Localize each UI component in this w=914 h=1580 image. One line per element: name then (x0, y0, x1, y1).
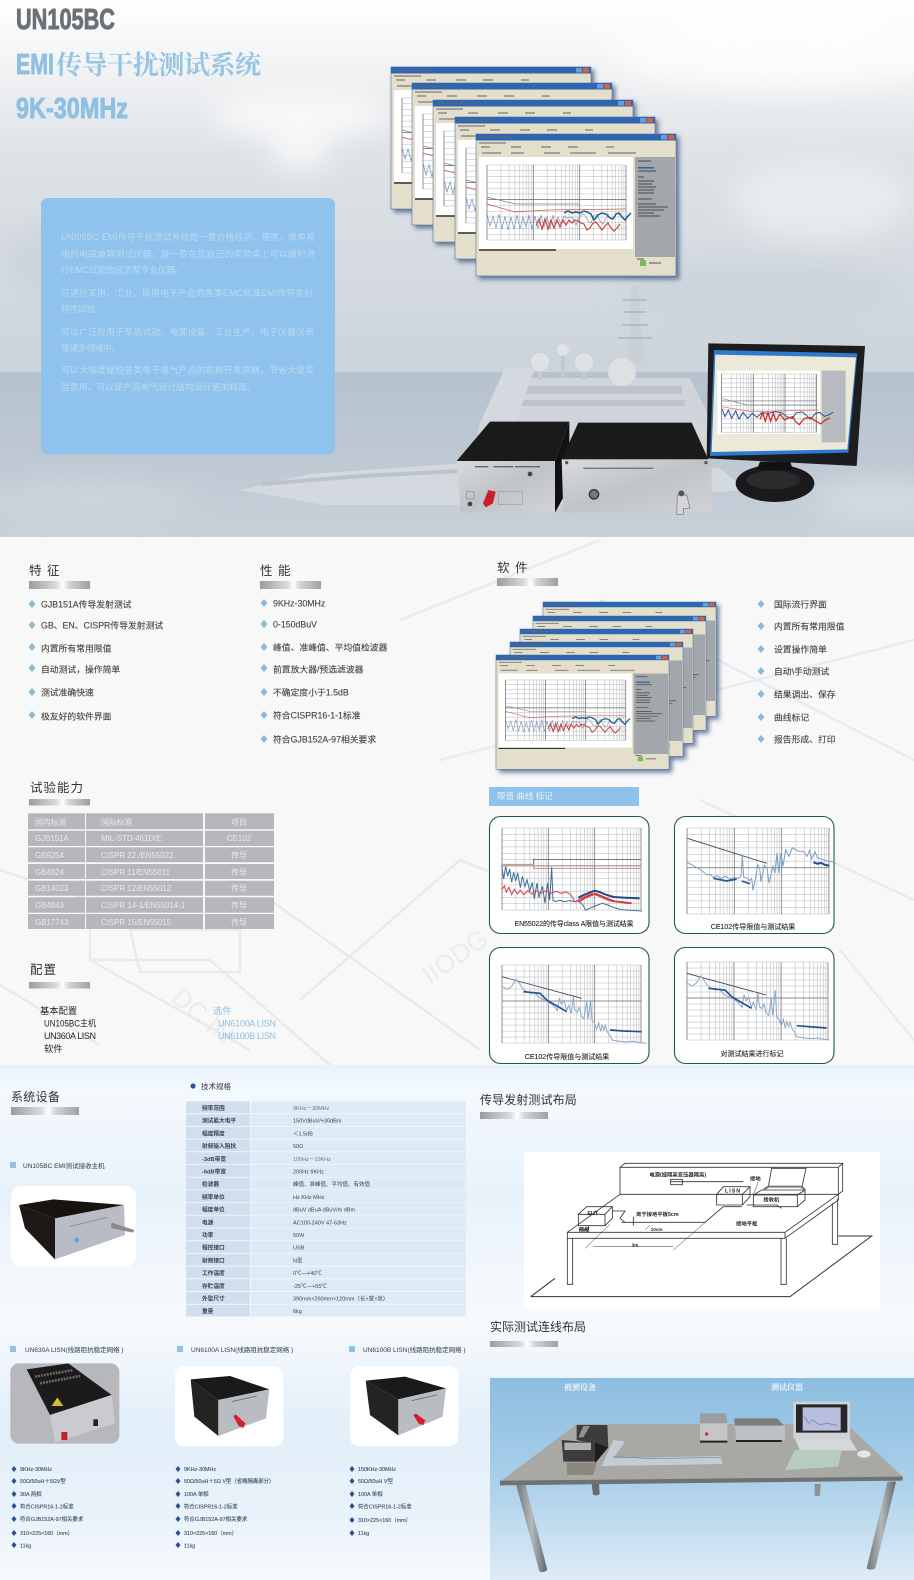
software feature list: 国际流行界面 (774, 598, 827, 610)
spec list: UN6100A: 符合CISPR16-1-2标准 (184, 1502, 238, 1510)
tab: limits and curve markers: 限值 曲线 标记 (497, 791, 553, 801)
spec list: UN6100B: 符合CISPR16-1-2标准 (358, 1502, 412, 1510)
performance list: 9KHz-30MHz (273, 598, 325, 608)
technical specification table: 频率单位 (202, 1193, 225, 1201)
heading: 试验能力 (29, 780, 90, 806)
table: test capability: 传导 (231, 883, 247, 893)
conducted emission test layout diagram: 接地 (750, 1174, 761, 1182)
heading: 技术规格: 技术规格 (201, 1081, 231, 1091)
technical specification table: 幅度单位 (202, 1206, 225, 1214)
conducted emission test layout diagram: 离于接地平板5cm (636, 1210, 679, 1218)
heading: 实际测试连线布局: 实际测试连线布局 (490, 1319, 586, 1334)
receiver and laptop (753, 1168, 806, 1207)
optional configuration (213, 1005, 276, 1041)
spec list: UN6100A: 100A 单相 (184, 1490, 209, 1498)
heading: 传导发射测试布局: 传导发射测试布局 (480, 1092, 577, 1107)
LISN unit (457, 422, 569, 513)
basic configuration: 基本配置 (40, 1005, 77, 1016)
accessory: UN6100B LISN: UN6100B LISN(线路阻抗稳定网络 ) (363, 1345, 466, 1354)
product photo: UN6100A (175, 1366, 283, 1446)
optional configuration: 选件 (213, 1005, 232, 1016)
faint circuit drawing backdrop: DC IN (166, 982, 240, 1050)
product image: UN105BC (11, 1186, 136, 1267)
accessory: UN630A LISN: UN630A LISN(线路阻抗稳定网络 ) (25, 1345, 124, 1354)
performance list: 符合GJB152A-97相关要求 (273, 734, 376, 744)
technical specification table: 存贮温度 (202, 1282, 225, 1290)
spec list: UN6100A: 50Ω/50uH＋5Ω V型（省略隔离部分） (184, 1477, 274, 1485)
technical specification table: 100Hz－10KHz (293, 1157, 331, 1163)
product photo: UN6100B (350, 1366, 458, 1446)
spec list: UN630A: 11kg (20, 1544, 31, 1550)
technical specification table: 150VdBuV/+30dBm (293, 1119, 342, 1125)
table: test capability: GB17743 (35, 918, 69, 927)
title: UN105BC: UN105BC (16, 4, 115, 36)
conducted emission test layout diagram: 10cm (651, 1227, 663, 1232)
basic configuration (40, 1005, 96, 1054)
heading: 性能: 性 能 (260, 564, 291, 578)
table: test capability: 项目 (231, 818, 247, 827)
cloud haze (0, 12, 914, 518)
table: test capability: CE102 (227, 834, 251, 843)
technical specification table: 390mm×260mm×120mm（长×宽×高） (293, 1294, 388, 1302)
accessory: UN630A LISN (10, 1345, 124, 1550)
warship silhouette (240, 286, 745, 505)
heading: 特征: 特 征 (29, 563, 60, 578)
technical specification table: 9KHz－30MHz (293, 1106, 330, 1112)
software feature list: 结果调出、保存 (774, 688, 836, 700)
label: UN105BC receiver (10, 1161, 105, 1170)
technical specification table: 射频输入阻抗 (202, 1142, 236, 1150)
performance list: 符合CISPR16-1-1标准 (273, 710, 361, 720)
table: test capability: GJB151A (35, 834, 70, 843)
conducted emission test layout diagram (524, 1152, 880, 1309)
table: test capability: 传导 (231, 867, 247, 877)
technical specification table: 电源 (202, 1218, 214, 1226)
technical specification table: 工作温度 (202, 1269, 225, 1277)
faint circuit drawing backdrop: IIODG (416, 923, 494, 990)
software feature list: 内置所有常用限值 (774, 620, 845, 632)
software feature list (758, 598, 845, 744)
monitor with test software (707, 343, 865, 502)
EUT box (578, 1207, 612, 1226)
technical specification table: ＜1.5dB (293, 1131, 313, 1137)
optional configuration: UN6100B LISN (218, 1031, 276, 1041)
feature list: 自动测试，操作简单 (41, 664, 120, 674)
conducted emission test layout diagram: 接收机 (763, 1196, 780, 1204)
technical specification table: 外型尺寸 (202, 1294, 225, 1302)
chart card: CE102 limits (upper): CE102传导限值与测试结果 (711, 922, 795, 931)
heading: 系统设备 (11, 1090, 79, 1115)
spec list: UN630A: 符合CISPR16-1-2标准 (20, 1502, 74, 1510)
spec list: UN630A (12, 1466, 84, 1550)
table: test capability: CISPR 15/EN55015 (101, 918, 172, 927)
spec list: UN630A: 310×225×160（mm） (20, 1530, 73, 1537)
technical specification table: -25℃—+55℃ (293, 1283, 327, 1290)
spec list: UN6100A: 310×225×160（mm） (184, 1530, 237, 1537)
chart card: CE102 limits (lower): CE102传导限值与测试结果 (525, 1052, 609, 1061)
heading: 技术规格 (190, 1081, 231, 1091)
panel: hero banner (0, 0, 914, 537)
optional configuration: UN6100A LISN (218, 1018, 276, 1028)
accessory: UN6100B LISN (349, 1345, 466, 1537)
basic configuration: UN360A LISN (44, 1031, 96, 1041)
technical specification table: Hz KHz MHz (293, 1195, 325, 1201)
table: test capability: CISPR 11/EN55011 (101, 868, 170, 877)
software window stack (496, 602, 716, 769)
cables (579, 1182, 782, 1230)
technical specification table: 200Hz 9KHz (293, 1170, 324, 1176)
panel: features and software section (0, 537, 914, 1065)
feature list: GJB151A传导发射测试 (41, 598, 132, 610)
performance list: 峰值、准峰值、平均值检波器 (273, 642, 388, 652)
spec list: UN630A: 9KHz-30MHz (20, 1467, 52, 1473)
panel: product description: 行EMC试验的经济型专业仪器。 (61, 264, 184, 275)
chart card: marked results: 对测试结果进行标记 (720, 1049, 784, 1058)
heading: 配置 (29, 963, 90, 988)
spec list: UN6100B: 50Ω/50uH V型 (358, 1477, 394, 1485)
table: test capability: 传导 (231, 917, 247, 927)
software feature list: 自动\手动测试 (774, 666, 829, 676)
performance list: 前置放大器/预选滤波器 (273, 664, 364, 674)
table: test capability: GB14023 (35, 884, 69, 893)
spec list: UN6100A: 9KHz-30MHz (184, 1467, 216, 1473)
panel: product description: 等诸多领域中。 (61, 342, 120, 353)
spec list: UN6100B: 150KHz-30MHz (358, 1467, 396, 1473)
technical specification table: 检波器 (202, 1180, 219, 1188)
table: test capability: CISPR 14-1/EN55014-1 (101, 901, 185, 910)
conducted emission test layout diagram: 预规 (579, 1226, 590, 1234)
feature list: 内置所有常用限值 (41, 642, 112, 654)
spec list: UN6100A (176, 1466, 274, 1550)
spec list: UN6100A: 符合GJB152A-97相关要求 (184, 1515, 248, 1523)
section background (0, 537, 914, 1065)
heading: 系统设备: 系统设备 (11, 1090, 60, 1104)
panel: product description: 特性试验。 (61, 303, 103, 314)
technical specification table (186, 1081, 466, 1316)
receiver main unit (562, 423, 712, 514)
heading: 试验能力: 试验能力 (30, 780, 84, 795)
table: test capability: GB4843 (35, 901, 65, 910)
technical specification table: N型 (293, 1256, 303, 1264)
sea background (0, 372, 914, 537)
accessory: UN6100A LISN (175, 1345, 293, 1550)
spec list: UN6100B: 11kg (358, 1531, 369, 1537)
heading: 软件 (497, 561, 558, 586)
feature list: GB、EN、CISPR传导发射测试 (41, 620, 163, 630)
tab: limits and curve markers (489, 787, 639, 806)
panel: product description: 可以大幅度缩短各类电子电气产品的前期开发周期，节省大量实 (61, 364, 314, 375)
software feature list: 报告形成、打印 (774, 734, 836, 744)
chart card: CE102 limits (upper) (674, 816, 836, 934)
table: test capability: 传导 (231, 850, 247, 860)
panel: product description: 验费用。可以使产品电气设计结构设计更加精简。 (61, 381, 256, 392)
performance list: 0-150dBuV (273, 620, 317, 630)
photo: actual test wiring setup (490, 1378, 914, 1580)
label: UN105BC receiver: UN105BC EMI测试接收主机 (23, 1161, 105, 1170)
feature list: 测试准确快速 (41, 686, 94, 698)
technical specification table: 峰值、准峰值、平均值、有效值 (293, 1180, 371, 1188)
chart card: marked results (674, 948, 834, 1064)
software window stack (391, 67, 676, 276)
title: 9K-30MHz: 9K-30MHz (16, 93, 128, 125)
technical specification table: 50W (293, 1233, 305, 1239)
heading: 传导发射测试布局 (480, 1092, 577, 1119)
heading: 实际测试连线布局 (490, 1319, 586, 1347)
technical specification table: 6kg (293, 1309, 302, 1315)
table: test capability: GB4824 (35, 868, 65, 877)
section background (0, 1065, 914, 1580)
table: test capability: GB9254 (35, 851, 65, 860)
ground plane (531, 1236, 872, 1297)
basic configuration: UN105BC主机 (44, 1018, 96, 1028)
table: test capability: 国际标准 (101, 817, 133, 827)
table top (567, 1194, 838, 1238)
technical specification table: 50Ω (293, 1144, 303, 1150)
chart card: CE102 limits (lower) (490, 948, 649, 1064)
technical specification table: 测试最大电平 (202, 1117, 236, 1125)
software feature list: 设置操作简单 (774, 644, 827, 654)
panel: product description: UNI05BC EMI传导干扰测试系统是一套价格经济、便携、简单易 (61, 231, 315, 242)
chart card: EN55022 class A (490, 816, 649, 934)
photo: actual test wiring setup: 被测设备 (564, 1382, 596, 1392)
conducted emission test layout diagram: LISN (725, 1189, 741, 1195)
sky background (0, 0, 914, 374)
table: test capability: MIL-STD-461D/E (101, 834, 162, 843)
spec list: UN630A: 符合GJB152A-97相关要求 (20, 1515, 84, 1523)
software feature list: 曲线标记 (774, 712, 809, 722)
technical specification table: 功率 (202, 1231, 214, 1239)
panel: product description: 用的电磁兼容测试仪器。是一款在您自己的实验桌上可以随时进 (61, 248, 315, 259)
conducted emission test layout diagram: 电源(经隔离变压器隔离) (649, 1170, 706, 1178)
panel: system equipment section (0, 1065, 914, 1580)
back wall (620, 1163, 843, 1194)
title: EMI传导干扰测试系统: EMI (16, 49, 54, 81)
table: test capability: CISPR 12/EN55012 (101, 884, 171, 893)
LISN box (717, 1187, 750, 1205)
technical specification table: -3dB带宽 (202, 1155, 226, 1163)
table: test capability (28, 813, 274, 929)
conducted emission test layout diagram: 3m (632, 1243, 638, 1248)
spec list: UN6100B: 310×225×160（mm） (358, 1517, 411, 1524)
spec list: UN6100A: 11kg (184, 1544, 195, 1550)
performance list: 不确定度小于1.5dB (273, 686, 349, 698)
technical specification table: dBuV dBuA dBuV/m dBm (293, 1208, 355, 1214)
spec list: UN6100B (350, 1466, 412, 1537)
technical specification table: -6dB带宽 (202, 1168, 226, 1176)
performance list (260, 598, 388, 744)
product photo: UN630A (10, 1363, 119, 1444)
technical specification table: 程控接口 (202, 1244, 225, 1252)
panel: product description (41, 198, 335, 454)
title: EMI传导干扰测试系统: 传导干扰测试系统 (56, 50, 263, 80)
photo: actual test wiring setup: 测试仪器 (771, 1382, 803, 1392)
technical specification table: 频率范围 (202, 1104, 225, 1112)
table: test capability: 国内标准 (35, 817, 67, 827)
panel: product description: 可进行军用、工业、民用电子产品的各类EMC标准EMI传导发射 (61, 287, 313, 298)
spec list: UN6100B: 100A 单相 (358, 1490, 383, 1498)
heading: 软件: 软 件 (497, 561, 528, 575)
heading: 配置: 配置 (30, 963, 57, 977)
panel: product description: 可以广泛应用于军品试验、电源设备、工业生产、电子仪器仪表 (61, 326, 314, 337)
basic configuration: 软件 (44, 1043, 63, 1054)
technical specification table: 重量 (202, 1307, 214, 1315)
accessory: UN6100A LISN: UN6100A LISN(线路阻抗稳定网络 ) (191, 1345, 293, 1354)
faint circuit drawing backdrop (0, 540, 914, 1065)
heading: 性能 (260, 564, 321, 589)
technical specification table: 幅度精度 (202, 1129, 225, 1137)
table: test capability: CISPR 22 /EN55022 (101, 851, 173, 860)
technical specification table: AC100-240V 47-63Hz (293, 1220, 347, 1226)
chart card: EN55022 class A: EN55022的传导class A限值与测试结果 (514, 919, 634, 928)
technical specification table: USB (293, 1246, 305, 1252)
table: test capability: 传导 (231, 900, 247, 910)
spec list: UN630A: 50Ω/50uH＋5ΩV型 (20, 1477, 66, 1485)
feature list (28, 598, 163, 722)
feature list: 极友好的软件界面 (41, 710, 112, 722)
heading: 特征 (29, 563, 90, 589)
technical specification table: 0℃—+40℃ (293, 1270, 322, 1277)
conducted emission test layout diagram: 接地平板 (736, 1220, 758, 1228)
spec list: UN630A: 30A 两相 (20, 1490, 42, 1498)
table legs (567, 1198, 838, 1284)
conducted emission test layout diagram: EUT (587, 1211, 599, 1217)
technical specification table: 射频接口 (202, 1256, 225, 1264)
